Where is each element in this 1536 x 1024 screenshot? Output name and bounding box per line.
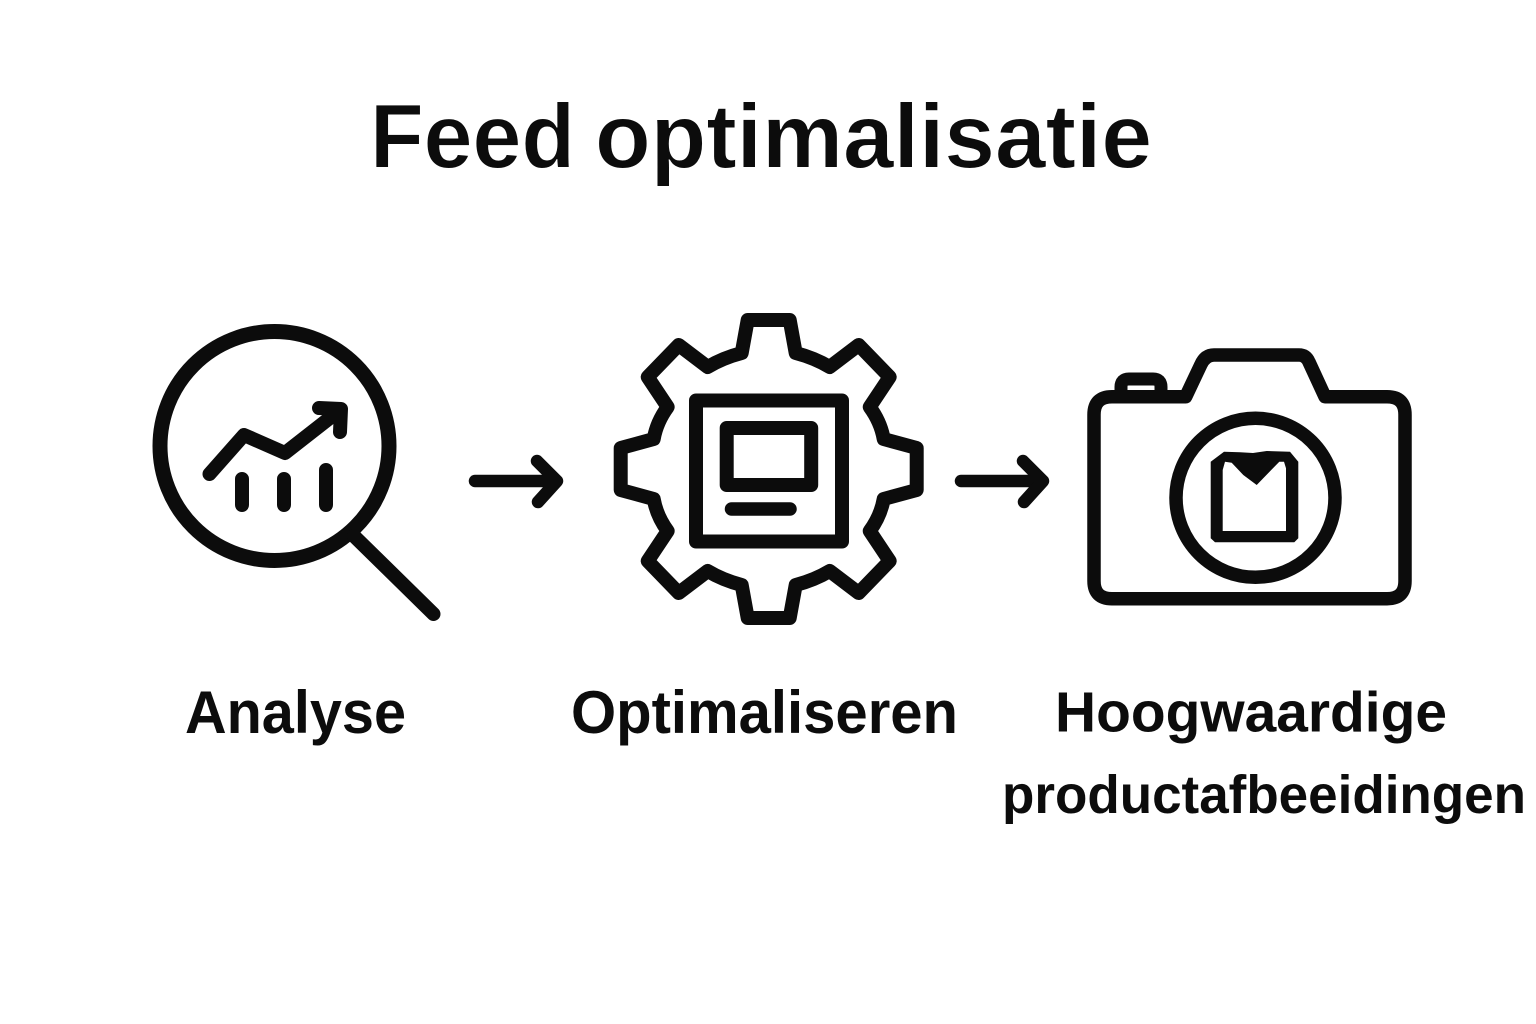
label: Analyse: Analyse bbox=[185, 679, 406, 746]
label: productafbeeidingen: productafbeeidingen bbox=[1002, 765, 1526, 825]
icon: magnifying glass with chart bbox=[160, 332, 434, 614]
arrow: analyse to optimaliseren bbox=[475, 461, 557, 502]
icon: camera with product shirt bbox=[1094, 355, 1405, 599]
label: Hoogwaardige: Hoogwaardige bbox=[1055, 680, 1447, 744]
icon: gear with monitor bbox=[621, 320, 917, 618]
arrow: optimaliseren to camera bbox=[961, 461, 1043, 502]
title: Feed bbox=[370, 86, 575, 188]
label: Optimaliseren: Optimaliseren bbox=[571, 679, 958, 746]
title: optimalisatie bbox=[595, 86, 1152, 188]
